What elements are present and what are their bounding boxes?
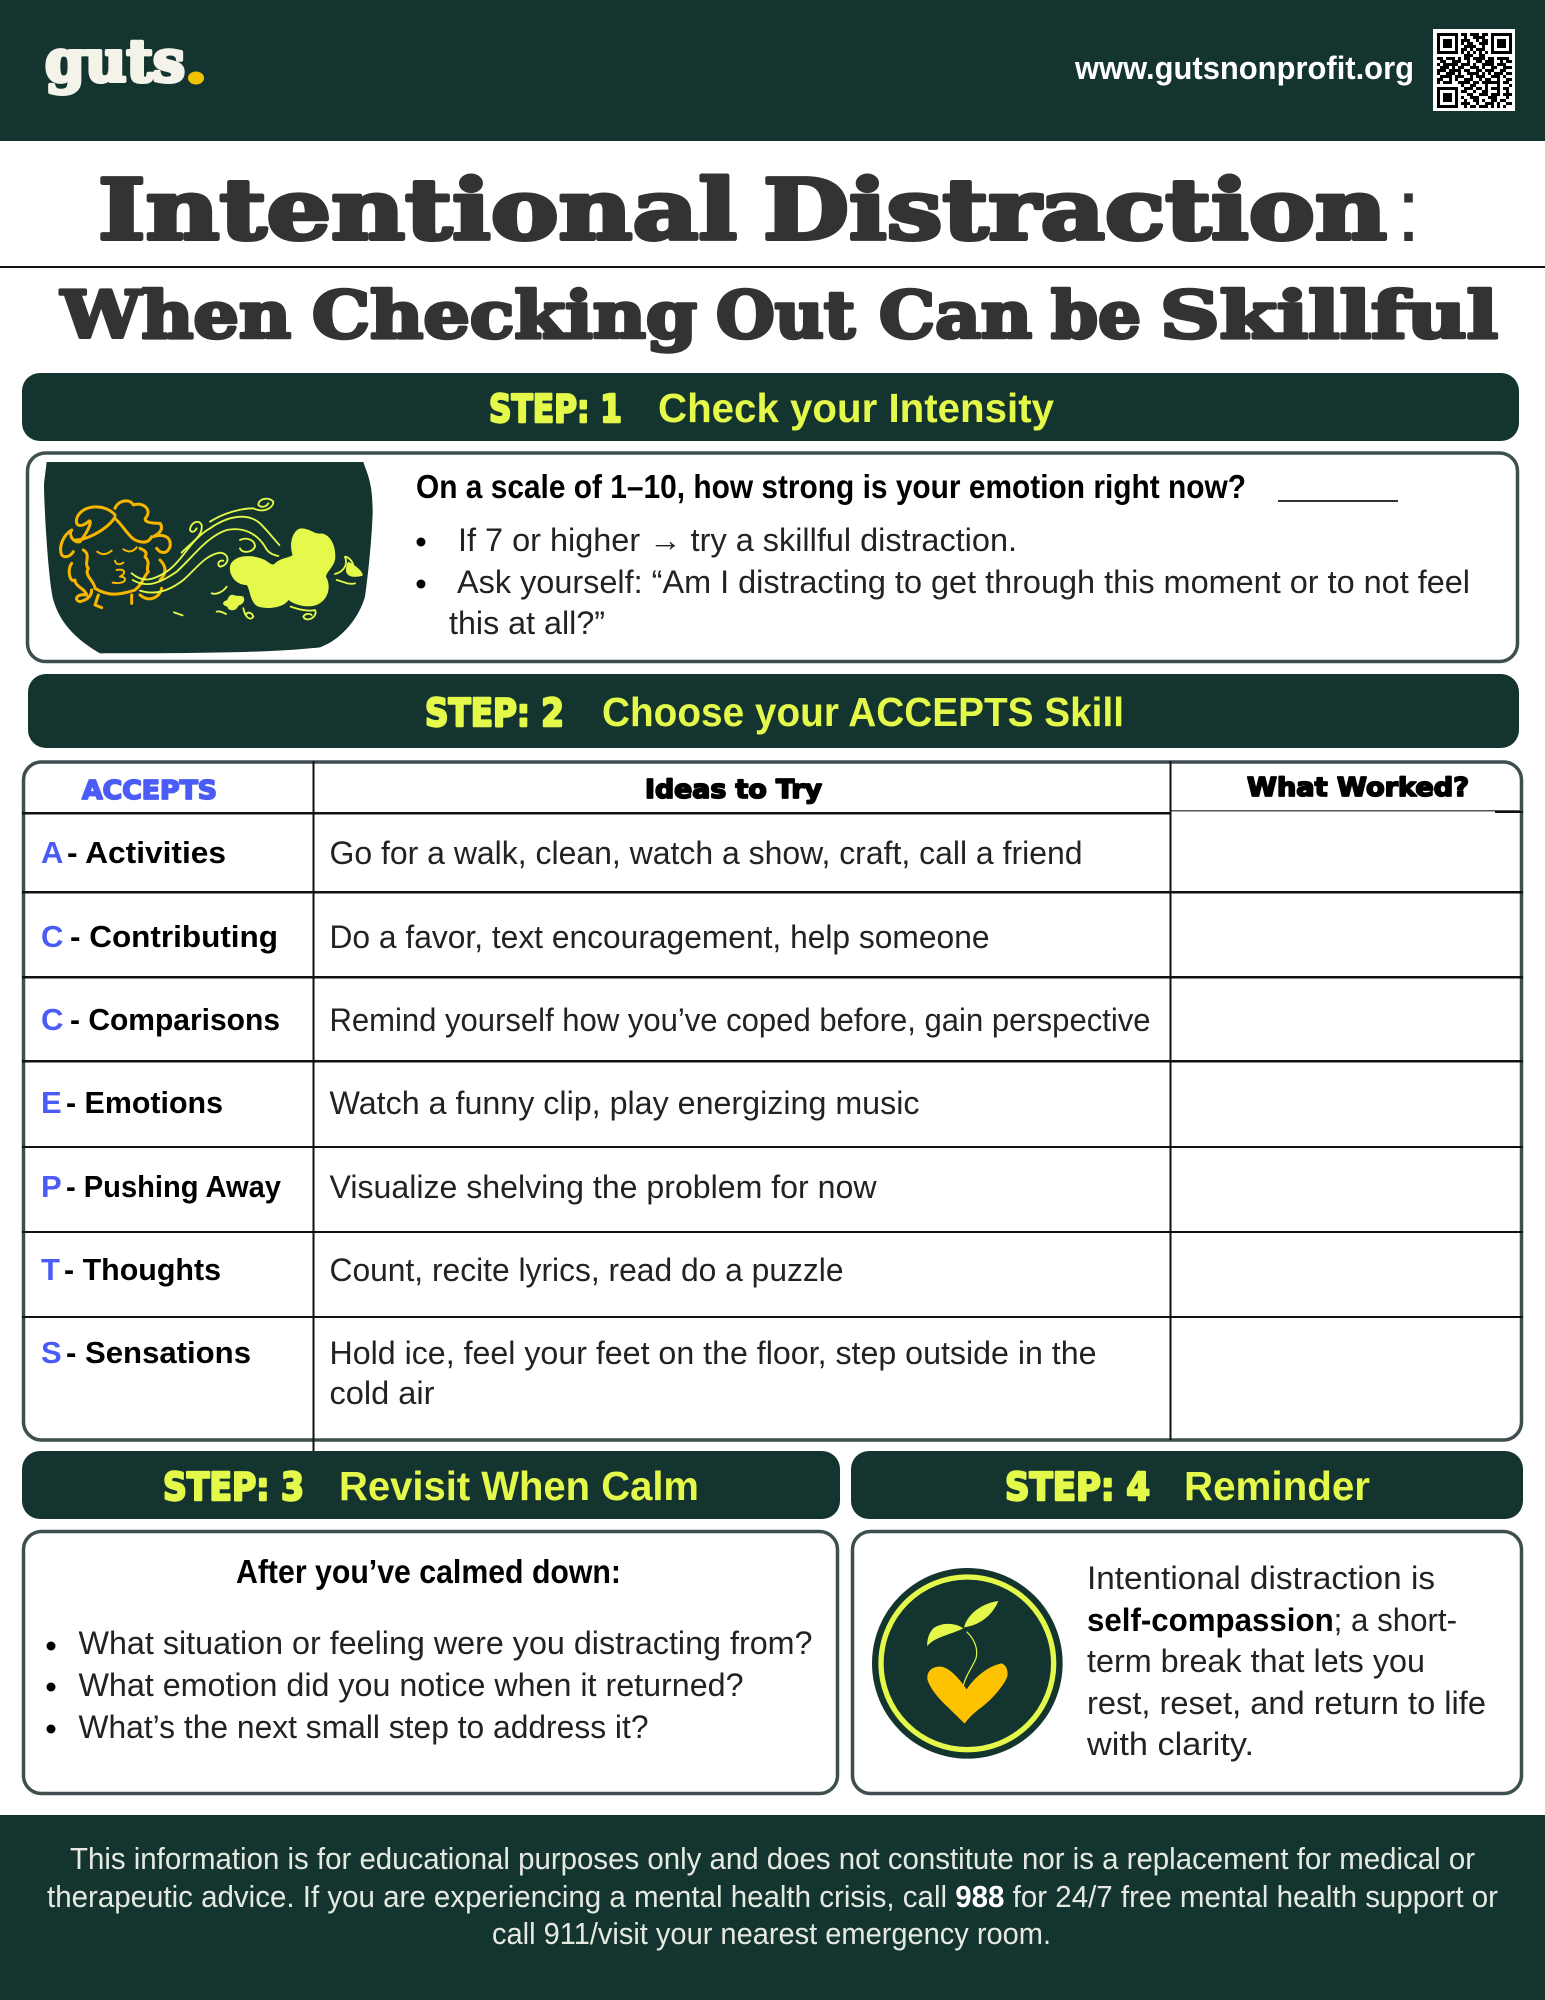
row: Sensations	[41, 1335, 1096, 1411]
row: Comparisons: - Comparisons	[70, 1002, 280, 1037]
step 4 heading bar	[851, 1451, 1523, 1519]
row: Contributing: - Contributing	[70, 919, 278, 954]
footer disclaimer	[0, 1815, 1545, 2000]
bullet list	[416, 522, 1470, 641]
reminder text: rest, reset, and return to life	[1087, 1685, 1486, 1721]
header band	[0, 0, 1545, 141]
question list: What emotion did you notice when it returned?	[78, 1667, 744, 1703]
reminder text	[1086, 1560, 1486, 1762]
bullet list: If 7 or higher → try a skillful distraction.	[458, 522, 1017, 558]
row: Pushing Away: P	[41, 1169, 62, 1204]
row: Emotions: E	[41, 1085, 62, 1120]
row: Thoughts	[41, 1252, 844, 1288]
panel heading: After you’ve calmed down:	[236, 1553, 621, 1590]
reminder text: Intentional distraction is	[1087, 1560, 1435, 1596]
row: Sensations: S	[41, 1335, 62, 1370]
row: Pushing Away: - Pushing Away	[66, 1169, 282, 1204]
step 3 heading bar: Revisit When Calm	[339, 1463, 699, 1509]
step 1 heading bar: Check your Intensity	[658, 385, 1054, 431]
step 4 heading bar: Reminder	[1184, 1463, 1370, 1509]
step 2 heading bar: Choose your ACCEPTS Skill	[602, 689, 1124, 735]
footer disclaimer: This information is for educational purposes only and does not constitute nor is a replacement for medical or	[70, 1841, 1475, 1876]
step 2 heading bar: STEP: 2	[425, 691, 564, 735]
row: Contributing	[41, 919, 990, 955]
step 1 heading bar	[22, 373, 1519, 441]
logo: guts: guts	[45, 27, 185, 95]
subtitle: Checking	[312, 278, 697, 354]
step 2 heading bar	[28, 674, 1519, 748]
reminder text: term break that lets you	[1087, 1643, 1425, 1679]
row: Contributing: Do a favor, text encouragement, help someone	[330, 919, 990, 955]
reminder text: self-compassion; a short-	[1087, 1602, 1457, 1638]
table header row	[82, 773, 1469, 806]
footer disclaimer: therapeutic advice. If you are experiencing a mental health crisis, call 988 for 24/7 free mental health support or	[47, 1879, 1498, 1914]
row: Comparisons: C	[41, 1002, 63, 1037]
row: Thoughts: - Thoughts	[64, 1252, 221, 1287]
step 3 heading bar: STEP: 3	[163, 1465, 304, 1509]
step 3 heading bar	[22, 1451, 840, 1519]
row: Activities: A	[41, 835, 63, 870]
question heading: On a scale of 1–10, how strong is your emotion right now?	[416, 468, 1246, 505]
question list: What situation or feeling were you distracting from?	[78, 1625, 812, 1661]
step 1 heading bar: STEP: 1	[489, 387, 622, 431]
subtitle: When	[60, 278, 291, 354]
row: Activities: - Activities	[67, 835, 226, 870]
row: Activities: Go for a walk, clean, watch a show, craft, call a friend	[330, 835, 1082, 871]
row: Sensations: - Sensations	[66, 1335, 251, 1370]
title: :	[1396, 161, 1421, 261]
row: Thoughts: T	[41, 1252, 60, 1287]
subtitle: Out	[716, 278, 855, 354]
row: Contributing: C	[41, 919, 63, 954]
bullet list: Ask yourself: “Am I distracting to get through this moment or to not feel	[457, 564, 1470, 600]
row: Emotions: Watch a funny clip, play energizing music	[330, 1085, 920, 1121]
title: Intentional	[98, 161, 737, 259]
footer disclaimer: call 911/visit your nearest emergency room.	[492, 1916, 1051, 1951]
row: Emotions: - Emotions	[66, 1085, 223, 1120]
panel: step 3 revisit questions	[24, 1532, 838, 1794]
row: Pushing Away	[41, 1169, 877, 1205]
row: Pushing Away: Visualize shelving the problem for now	[330, 1169, 877, 1205]
subtitle: Skillful	[1160, 278, 1498, 354]
table header row: Ideas to Try	[645, 775, 822, 805]
subtitle: be	[1051, 278, 1141, 354]
subtitle: Can	[879, 278, 1032, 354]
icon: sprout growing from heart	[872, 1568, 1063, 1759]
question list: What’s the next small step to address it?	[78, 1709, 648, 1745]
subtitle	[60, 278, 1498, 354]
reminder text: with clarity.	[1086, 1726, 1254, 1762]
title	[98, 161, 1421, 261]
row: Sensations: Hold ice, feel your feet on the floor, step outside in the	[330, 1335, 1096, 1371]
panel: step 4 reminder	[852, 1532, 1522, 1794]
row: Comparisons: Remind yourself how you’ve coped before, gain perspective	[330, 1002, 1150, 1038]
panel: step 1 intensity check	[28, 453, 1518, 662]
table header row: ACCEPTS	[82, 776, 217, 806]
row: Thoughts: Count, recite lyrics, read do a puzzle	[330, 1252, 844, 1288]
question list	[46, 1625, 812, 1745]
illustration: wind blowing from face	[44, 462, 373, 653]
website url: www.gutsnonprofit.org	[1074, 50, 1414, 86]
row: Emotions	[41, 1085, 920, 1121]
QR code	[1433, 29, 1515, 111]
table header row: What Worked?	[1247, 773, 1469, 803]
row: Sensations: cold air	[330, 1375, 435, 1411]
step 4 heading bar: STEP: 4	[1005, 1465, 1150, 1509]
table: ACCEPTS skills	[22, 761, 1523, 1451]
answer blank	[1278, 500, 1398, 502]
title: Distraction	[763, 161, 1387, 259]
bullet list: this at all?”	[449, 605, 605, 641]
